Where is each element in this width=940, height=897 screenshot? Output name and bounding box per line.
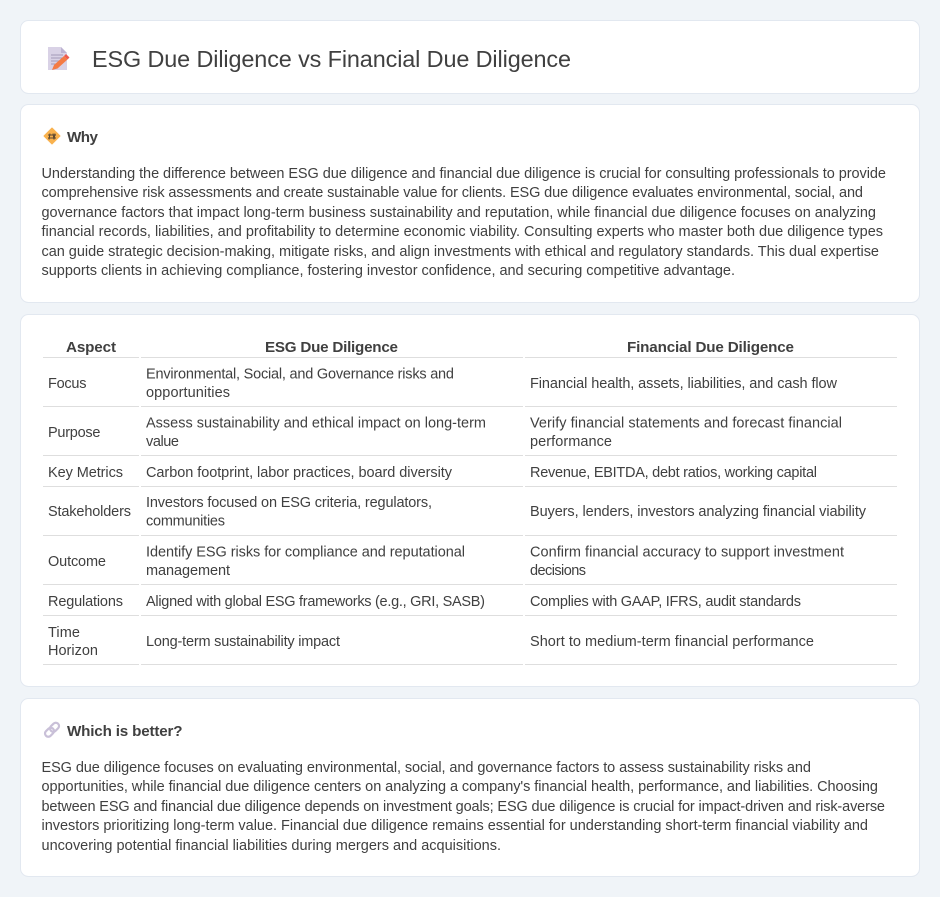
row: time horizon: Horizon: [48, 643, 98, 659]
row: time horizon: [48, 625, 814, 659]
text block: which is better paragraph: [42, 760, 885, 854]
text block: why paragraph: supports clients in achieving compliance, fostering investor confidence, and securing competitive advantage.: [42, 263, 735, 279]
row: focus: [48, 366, 838, 401]
text block: why paragraph: can guide strategic decision-making, mitigate risks, and align investments with ethical and regulatory standards. This dual expertise: [42, 244, 879, 260]
row: regulations: Regulations: [48, 594, 123, 610]
table header row: Financial Due Diligence: [627, 339, 794, 356]
row: stakeholders: [48, 495, 867, 530]
row: focus: Focus: [48, 376, 86, 392]
text block: which is better paragraph: ESG due diligence focuses on evaluating environmental, social, and governance factors to assess sustainability risks and: [42, 760, 811, 776]
table header row: Aspect: [66, 339, 116, 356]
row: key metrics: Revenue, EBITDA, debt ratios, working capital: [530, 465, 817, 481]
row: regulations: Aligned with global ESG frameworks (e.g., GRI, SASB): [146, 594, 485, 610]
row: focus: Environmental, Social, and Governance risks and: [146, 366, 454, 382]
icon: document with pencil: [48, 47, 70, 70]
text block: why paragraph: Understanding the difference between ESG due diligence and financial due diligence is crucial for consulting professionals to provide: [42, 166, 886, 182]
row: outcome: Outcome: [48, 554, 106, 570]
panel: why: [20, 104, 920, 302]
panel: which is better: [20, 698, 920, 876]
row: outcome: decisions: [530, 563, 586, 579]
row: purpose: Purpose: [48, 425, 100, 441]
row: outcome: Identify ESG risks for compliance and reputational: [146, 544, 465, 560]
row: purpose: Verify financial statements and forecast financial: [530, 416, 842, 432]
row: stakeholders: Stakeholders: [48, 504, 131, 520]
table header row: [66, 339, 794, 356]
text block: why paragraph: governance factors that impact long-term business sustainability and reputation, while financial due diligence focuses on analyzing: [42, 205, 876, 221]
row: focus: opportunities: [146, 385, 230, 401]
text block: which is better paragraph: uncovering potential financial liabilities during mergers and acquisitions.: [42, 838, 501, 854]
panel: comparison table: [20, 314, 920, 686]
text block: why paragraph: comprehensive risk assessments and create sustainable value for clients. ESG due diligence evaluates environmental, social, and: [42, 185, 863, 201]
text block: why paragraph: [42, 166, 886, 279]
row: key metrics: [48, 465, 817, 481]
heading: why: Why: [67, 129, 99, 146]
row: regulations: Complies with GAAP, IFRS, audit standards: [530, 594, 801, 610]
row: regulations: [48, 594, 801, 610]
table header row: ESG Due Diligence: [265, 339, 398, 356]
row: purpose: value: [146, 434, 179, 450]
row: outcome: [48, 544, 844, 579]
row: stakeholders: communities: [146, 514, 225, 530]
icon: chain link: [44, 721, 60, 738]
row: purpose: performance: [530, 434, 612, 450]
heading: which is better: Which is better?: [67, 723, 182, 740]
row: stakeholders: Buyers, lenders, investors analyzing financial viability: [530, 504, 867, 520]
text block: which is better paragraph: investors prioritizing long-term value. Financial due diligence remains essential for understanding short-term financial viability and: [42, 818, 868, 834]
row: time horizon: Long-term sustainability impact: [146, 634, 340, 650]
row: key metrics: Key Metrics: [48, 465, 123, 481]
text block: why paragraph: financial records, liabilities, and profitability to determine economic viability. Consulting experts who master both due diligence types: [42, 224, 883, 240]
text block: which is better paragraph: between ESG and financial due diligence depends on investment goals; ESG due diligence is crucial for impact-driven and risk-averse: [42, 799, 885, 815]
row: outcome: management: [146, 563, 230, 579]
panel: header: [20, 20, 920, 94]
text block: which is better paragraph: opportunities, while financial due diligence centers on analyzing a company's financial health, performance, and liabilities. Choosing: [42, 779, 878, 795]
row: focus: Financial health, assets, liabilities, and cash flow: [530, 376, 838, 392]
row: stakeholders: Investors focused on ESG criteria, regulators,: [146, 495, 432, 511]
row: time horizon: Short to medium-term financial performance: [530, 634, 814, 650]
row: purpose: [48, 416, 842, 450]
row: time horizon: Time: [48, 625, 80, 641]
row: outcome: Confirm financial accuracy to support investment: [530, 544, 844, 560]
title: ESG Due Diligence vs Financial Due Diligence: [92, 46, 571, 72]
icon: warning diamond: [44, 128, 60, 144]
row: purpose: Assess sustainability and ethical impact on long-term: [146, 416, 486, 432]
row: key metrics: Carbon footprint, labor practices, board diversity: [146, 465, 453, 481]
